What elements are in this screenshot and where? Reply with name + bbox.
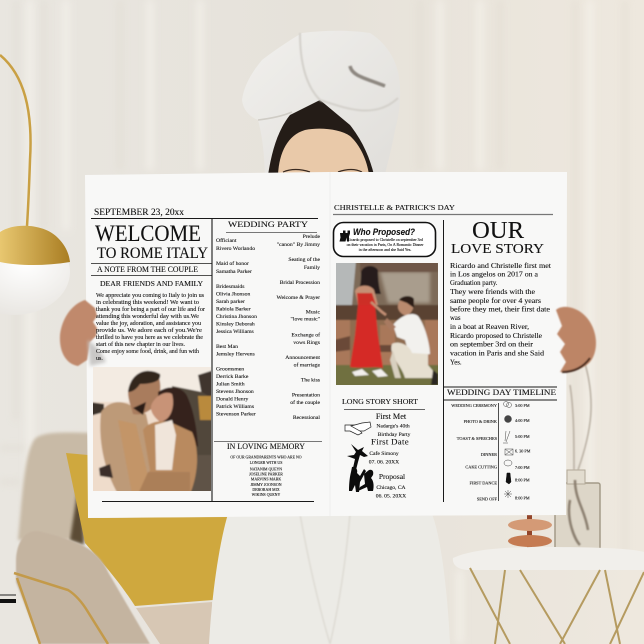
list: ceremony order: Announcement: [285, 355, 320, 361]
text block: milestones: Chicago, CA: [376, 485, 406, 491]
woman: head wrapped in towel: [242, 31, 400, 175]
list: wedding party names: Groomsmen: [216, 366, 244, 372]
timeline times: 4:00 PM: [515, 418, 530, 423]
text block: love story: in Los angelos on 2017 on a: [450, 272, 538, 278]
text block: welcome note: us.: [96, 356, 103, 362]
text block: loving memory names: LONGER WITH US: [250, 461, 282, 465]
text block: milestones: First Met: [376, 412, 407, 421]
list: ceremony order: vows Rings: [293, 340, 321, 346]
subheading: dear friends: DEAR FRIENDS AND FAMILY: [100, 279, 204, 288]
title: our love story: OUR: [472, 218, 524, 244]
timeline labels: TOAST & SPEECHES: [457, 436, 498, 441]
text block: loving memory names: [230, 456, 302, 497]
text block: love story: on september 3rd on their: [450, 342, 534, 348]
icon: handshake: [345, 422, 371, 435]
side table with decor: [453, 360, 644, 644]
left page rules: [91, 218, 322, 502]
timeline times: 3:00 PM: [515, 403, 530, 408]
woman: right hand: [556, 307, 596, 372]
timeline labels: WEDDING CEREMONY: [451, 403, 497, 408]
text block: love story: before they met, their first date: [450, 306, 550, 314]
timeline labels: DINNER: [481, 452, 497, 457]
list: ceremony order: Welcome & Prayer: [277, 295, 320, 301]
list: wedding party names: Christina Jhonson: [216, 314, 257, 320]
list: wedding party names: Rivero Worlando: [216, 246, 255, 252]
text block: milestones: Proposal: [379, 472, 405, 481]
list: ceremony order: of the couple: [290, 399, 320, 406]
text block: welcome note: thrilled to have you here as we celebrate the: [96, 335, 203, 341]
list: wedding party names: Sarah parker: [216, 299, 245, 305]
list: ceremony order: of marriage: [294, 362, 320, 368]
list: wedding party names: Officiant: [216, 237, 237, 244]
list: wedding party names: Bridesmaids: [216, 284, 245, 290]
callout: who proposed: Who Proposed?: [353, 227, 415, 237]
photo: embracing couple: [90, 364, 214, 494]
text block: love story: They were friends with the: [450, 289, 535, 296]
photo: proposal: [334, 261, 440, 387]
list: wedding party names: Kinsley Deborah: [216, 322, 255, 328]
timeline times: 5:00 PM: [515, 434, 530, 439]
text block: milestones: First Date: [371, 436, 409, 446]
list: wedding party names: [216, 237, 257, 418]
timeline labels: FIRST DANCE: [470, 480, 497, 486]
list: ceremony order: [277, 234, 321, 421]
list: wedding party names: Stevens Jhonson: [216, 389, 254, 395]
text block: welcome note: start of this new chapter in our lives.: [96, 341, 185, 348]
text block: welcome note: provide us. We adore each of you.We're: [96, 327, 202, 334]
list: wedding party names: Rabiola Barker: [216, 306, 251, 312]
list: wedding party names: Jemsley Hervens: [216, 352, 255, 358]
text block: loving memory names: DEBORAH MIX: [252, 488, 280, 492]
text block: milestones: 06. 05. 20XX: [376, 494, 406, 500]
list: wedding party names: Derrick Barke: [216, 374, 249, 380]
list: wedding party names: Jessica Williams: [216, 329, 255, 335]
text block: milestones: Nadarge's 40th: [376, 424, 410, 430]
text block: love story: Ricardo proposed to Christelle: [450, 333, 542, 340]
text block: welcome note: [96, 293, 205, 362]
text block: love story: was: [450, 315, 461, 322]
text block: welcome note: thank you for being a part of our life and for: [96, 306, 205, 313]
list: wedding party names: Olivia Jhonson: [216, 292, 250, 298]
timeline times: 6. 30 PM: [515, 448, 531, 454]
date heading: SEPTEMBER 23, 20xx: [94, 208, 184, 218]
text block: love story: same people for over 4 years: [450, 298, 541, 305]
callout: who proposed: [334, 222, 436, 256]
timeline heading: WEDDING DAY TIMELINE: [447, 388, 556, 397]
list: wedding party names: Maid of honor: [216, 260, 249, 267]
right page rules: [333, 214, 557, 502]
text block: welcome note: in celebrating this weekend! We want to: [96, 300, 199, 306]
list: ceremony order: Presentation: [292, 392, 320, 398]
text block: loving memory names: JIMMY JOONSON: [250, 483, 282, 487]
timeline labels: SEND OFF: [477, 496, 498, 502]
lamp: [0, 55, 70, 315]
list: wedding party names: Best Man: [216, 344, 238, 350]
list: ceremony order: Family: [304, 265, 320, 271]
text block: loving memory names: OF OUR GRANDPARENTS WHO ARE NO: [230, 456, 302, 460]
in loving memory heading: IN LOVING MEMORY: [227, 442, 305, 451]
timeline labels: [451, 403, 498, 502]
long story short heading: LONG STORY SHORT: [342, 398, 419, 406]
text block: loving memory names: JOSELINE PARKER: [249, 472, 283, 476]
list: ceremony order: Exchange of: [291, 332, 320, 338]
subheading: note: A NOTE FROM THE COUPLE: [97, 265, 198, 274]
title: welcome: WELCOME: [95, 221, 201, 246]
timeline times: 8:00 PM: [515, 478, 530, 482]
text block: love story: vacation in Paris and she Said: [450, 350, 545, 358]
chart: wedding day timeline: [451, 402, 531, 502]
icon: silhouette lift: [347, 444, 374, 492]
list: wedding party names: Julian Smith: [216, 382, 245, 388]
text block: milestones: Birthday Party: [378, 432, 411, 438]
title: our love story: [451, 218, 544, 256]
title: welcome: [95, 221, 208, 262]
text block: milestones: [369, 412, 411, 500]
list: ceremony order: The kiss: [301, 378, 321, 384]
list: ceremony order: Prelude: [303, 234, 320, 240]
title: our love story: LOVE STORY: [451, 241, 544, 256]
timeline times: 7:00 PM: [515, 465, 530, 470]
timeline times: [515, 403, 531, 500]
list: ceremony order: Bridal Procession: [280, 280, 320, 286]
list: wedding party names: Patrick Williams: [216, 404, 255, 410]
text block: love story: Graduation party.: [450, 280, 498, 287]
timeline labels: PHOTO & DRINK: [464, 419, 498, 424]
newspaper sheet: [85, 172, 567, 518]
text block: love story: in a boat at Reaven River,: [450, 324, 529, 331]
text block: welcome note: We appreciate you coming to Italy to join us: [96, 293, 205, 299]
text block: loving memory names: NATANIM QUEYN: [250, 468, 282, 472]
list: ceremony order: Recessional: [293, 415, 320, 421]
list: ceremony order: "canon" By Jimmy: [277, 242, 320, 248]
text block: love story: Yes.: [450, 360, 462, 366]
armchair: [0, 433, 228, 644]
text block: loving memory names: MARVINS MARK: [251, 478, 281, 482]
callout: who proposed: Ricardo proposed to Christelle on september 3rd: [347, 238, 423, 242]
text block: welcome note: Come enjoy some food, drink, and fun with: [96, 348, 199, 355]
wedding party heading: WEDDING PARTY: [228, 219, 308, 229]
text block: welcome note: attending this wonderful day with us.We: [96, 313, 199, 320]
text block: milestones: 07. 06. 20XX: [369, 460, 399, 466]
list: ceremony order: Seating of the: [288, 256, 320, 263]
woman: bathrobe: [209, 514, 450, 644]
text block: welcome note: value the joy, adoration, and assistance you: [96, 321, 201, 327]
text block: loving memory names: WIKINS QUENY: [252, 493, 281, 497]
callout: who proposed: on their vacation in Paris, On A Romantic Dinner: [347, 243, 424, 248]
list: ceremony order: "love music": [291, 316, 320, 322]
timeline labels: CAKE CUTTING: [465, 464, 497, 470]
list: wedding party names: Donald Henry: [216, 396, 249, 402]
icon: proposing couple: [340, 230, 350, 242]
woman: left hand: [60, 300, 106, 366]
text block: milestones: Cafe Simony: [369, 450, 399, 457]
callout: who proposed: in the afternoon and she Said Yes.: [359, 248, 411, 252]
list: wedding party names: Samatha Parker: [216, 269, 252, 275]
right page heading: CHRISTELLE & PATRICK'S DAY: [334, 203, 455, 212]
list: wedding party names: Stevenson Parker: [216, 412, 256, 418]
timeline times: 8:00 PM: [515, 496, 530, 500]
list: ceremony order: Music: [306, 310, 320, 316]
text block: love story: [450, 263, 551, 366]
timeline icons: [503, 402, 513, 498]
text block: love story: Ricardo and Christelle first met: [450, 263, 551, 270]
title: welcome: TO ROME ITALY: [97, 245, 208, 262]
